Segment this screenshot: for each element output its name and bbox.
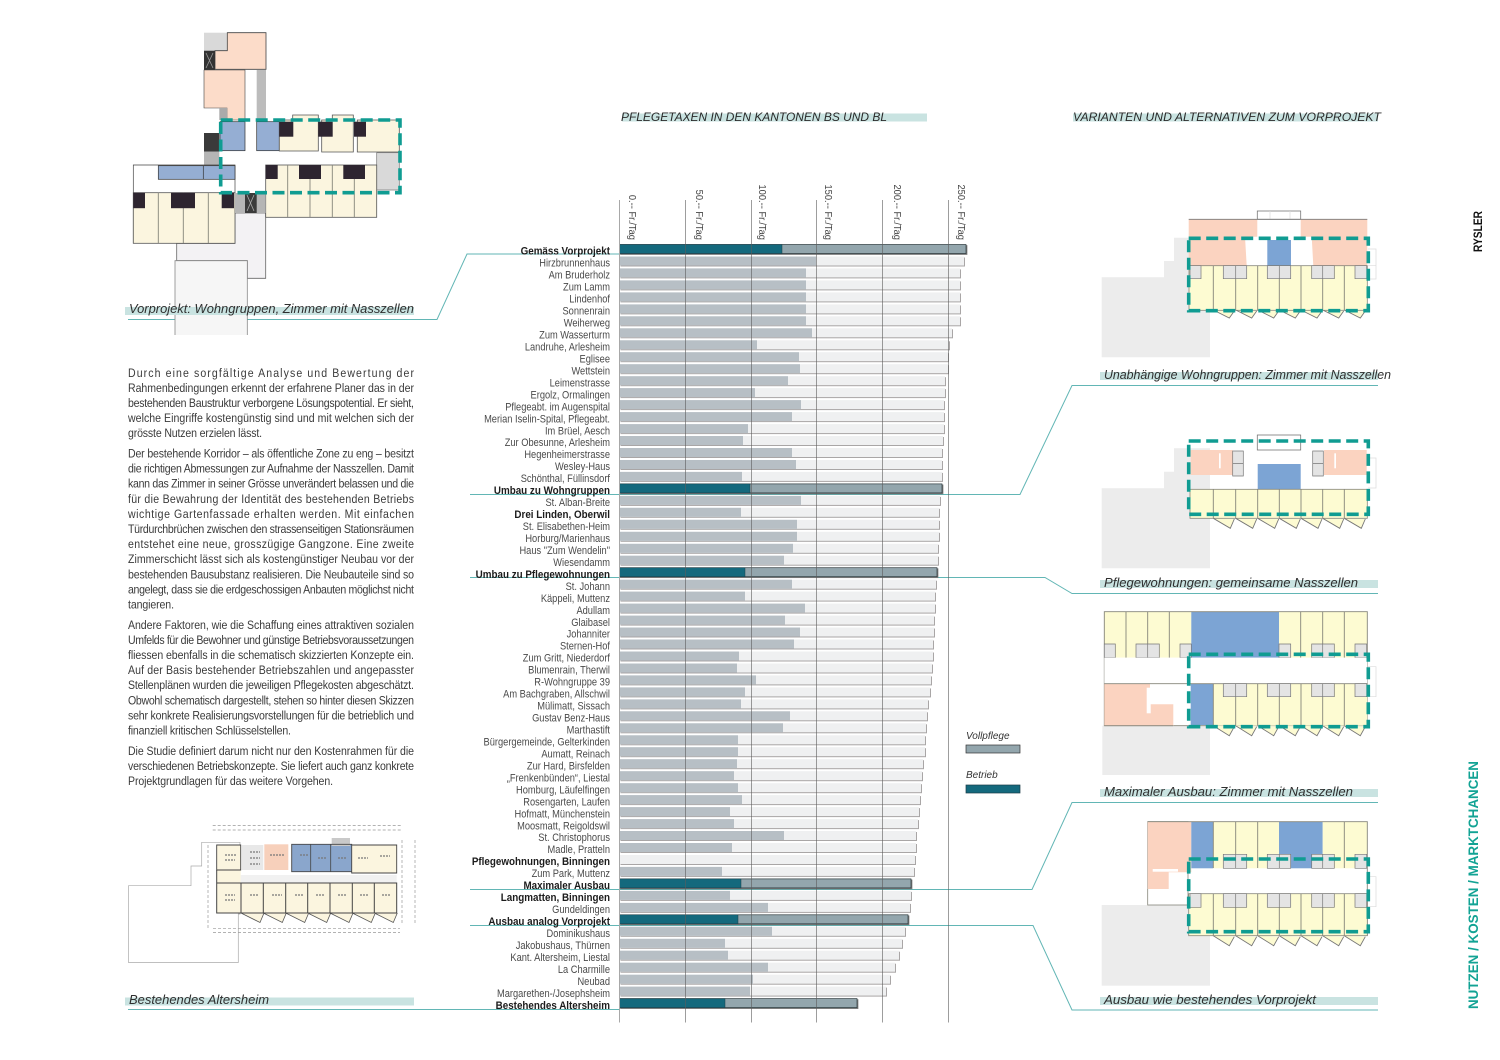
row: Hirzbrunnenhaus: Hirzbrunnenhaus xyxy=(539,258,610,270)
row: Sonnenrain xyxy=(562,304,960,318)
row: Frenkenbünden, Liestal xyxy=(507,771,922,785)
row: Zum Lamm xyxy=(563,280,960,294)
row: Bürgergemeinde, Gelterkinden xyxy=(484,735,925,749)
row: St. Elisabethen-Heim: St. Elisabethen-Heim xyxy=(523,521,610,533)
row: Eglisee xyxy=(580,352,948,366)
row: Wettstein: Wettstein xyxy=(571,366,610,378)
text block: body copy: Türdurchbrüchen zwischen den strassenseitigen Stationsräumen xyxy=(128,523,414,536)
row: Im Brüel, Aesch xyxy=(545,424,944,438)
row: St. Elisabethen-Heim xyxy=(523,520,939,533)
row: Homburg, Läufelfingen xyxy=(516,783,921,797)
row: Horburg/Marienhaus xyxy=(525,532,939,545)
row: St. Alban-Breite xyxy=(545,496,940,509)
row: Hofmatt, Münchenstein xyxy=(515,807,919,821)
row: Pflegeabt. im Augenspital: Pflegeabt. im Augenspital xyxy=(505,402,610,414)
row: Wesley-Haus: Wesley-Haus xyxy=(555,462,610,473)
caption: Bestehendes Altersheim xyxy=(125,992,414,1007)
row: St. Alban-Breite: St. Alban-Breite xyxy=(545,497,610,509)
row: Merian Iselin-Spital, Pflegeabt.: Merian Iselin-Spital, Pflegeabt. xyxy=(484,414,610,426)
row: Schönthal, Füllinsdorf: Schönthal, Füllinsdorf xyxy=(521,473,610,485)
row: Maximaler Ausbau xyxy=(523,879,911,892)
row: Hirzbrunnenhaus xyxy=(539,256,964,270)
row: Bestehendes Altersheim xyxy=(496,999,857,1012)
row: Neubad xyxy=(577,975,890,988)
row: Schönthal, Füllinsdorf xyxy=(521,472,942,485)
row: Gustav Benz-Haus xyxy=(532,711,927,725)
row: R-Wohngruppe 39: R-Wohngruppe 39 xyxy=(534,677,610,689)
floor plan: Ausbau wie Vorprojekt xyxy=(1102,822,1376,986)
legend: Vollpflege xyxy=(966,731,1010,742)
chart axis: grid lines and scale labels: 200.-- Fr./Tag xyxy=(891,184,902,240)
text block: body copy: Andere Faktoren, wie die Schaffung eines attraktiven sozialen xyxy=(128,619,414,632)
row: Frenkenbünden, Liestal: „Frenkenbünden“, Liestal xyxy=(507,773,610,785)
chart axis: grid lines and scale labels: 0.-- Fr./Tag xyxy=(626,195,637,240)
chart axis: grid lines and scale labels: 250.-- Fr./Tag xyxy=(955,184,966,240)
floor plan: Maximaler Ausbau xyxy=(1102,612,1376,775)
chart axis: grid lines and scale labels: 100.-- Fr./Tag xyxy=(756,184,767,240)
text block: body copy: tangieren. xyxy=(128,599,174,612)
row: La Charmille xyxy=(558,963,895,976)
text block: body copy: wichtige Gartenfassade erhalten werden. Mit einfachen xyxy=(127,508,414,521)
row: Gemäss Vorprojekt xyxy=(521,244,966,258)
row: Zum Gritt, Niederdorf xyxy=(523,652,933,665)
text block: body copy: bestehenden Bausubstanz realisieren. Die Neubauteile sind so xyxy=(128,569,414,581)
text block: body copy: finanziell kritischen Schlüsselstellen. xyxy=(128,725,291,738)
caption: Unabhängige Wohngruppen: Unabhängige Wohngruppen: Zimmer mit Nasszellen xyxy=(1104,367,1391,382)
row: Jakobushaus, Thürnen: Jakobushaus, Thürnen xyxy=(516,940,610,952)
row: Mülimatt, Sissach: Mülimatt, Sissach xyxy=(537,701,610,713)
row: Langmatten, Binningen: Langmatten, Binningen xyxy=(501,893,610,904)
row: Adullam: Adullam xyxy=(576,605,610,617)
row: Dominikushaus xyxy=(547,927,905,940)
row: Dominikushaus: Dominikushaus xyxy=(547,928,610,940)
text block: body copy: grösste Nutzen erzielen lässt. xyxy=(128,427,262,440)
row: Drei Linden, Oberwil xyxy=(514,508,939,521)
text block: body copy: bestehenden Baustruktur verborgene Lösungspotential. Er sieht, xyxy=(128,397,414,410)
row: Kant. Altersheim, Liestal xyxy=(510,951,899,964)
text block: body copy: Zimmerschicht lässt sich als kostengünstiger Neubau vor der xyxy=(128,554,414,566)
row: Blumenrain, Therwil: Blumenrain, Therwil xyxy=(528,665,610,677)
text block: body copy: Durch eine sorgfältige Analyse und Bewertung der xyxy=(128,367,414,380)
row: Am Bachgraben, Allschwil: Am Bachgraben, Allschwil xyxy=(503,689,610,701)
heading: Pflegetaxen: PFLEGETAXEN IN DEN KANTONEN BS UND BL xyxy=(621,110,887,124)
text block: body copy: verschiedenen Betriebskonzepte. Sie liefert auch ganz konkrete xyxy=(128,760,414,773)
row: Sonnenrain: Sonnenrain xyxy=(562,306,610,318)
bar chart: Pflegetaxen xyxy=(472,244,966,1012)
row: Margarethen-/Josephsheim: Margarethen-/Josephsheim xyxy=(497,988,610,1000)
row: Weiherweg xyxy=(564,316,960,330)
text block: body copy: Die Studie definiert darum nicht nur den Kostenrahmen für die xyxy=(128,745,414,758)
row: Landruhe, Arlesheim xyxy=(525,340,949,354)
floor plan: bestehendes Altersheim xyxy=(128,826,415,962)
row: Gemäss Vorprojekt: Gemäss Vorprojekt xyxy=(521,246,610,258)
text block: body copy: sehr konkrete Realisierungsvorstellungen für die betrieblich und xyxy=(128,710,414,722)
row: Ergolz, Ormalingen: Ergolz, Ormalingen xyxy=(531,390,610,402)
row: Umbau zu Pflegewohnungen: Umbau zu Pflegewohnungen xyxy=(476,569,610,581)
text block: body copy xyxy=(127,367,415,788)
row: Eglisee: Eglisee xyxy=(580,354,610,366)
row: Käppeli, Muttenz: Käppeli, Muttenz xyxy=(541,593,610,605)
row: Zur Obesunne, Arlesheim: Zur Obesunne, Arlesheim xyxy=(505,438,610,449)
row: Glaibasel xyxy=(571,616,934,629)
row: Kant. Altersheim, Liestal: Kant. Altersheim, Liestal xyxy=(510,952,610,964)
row: Adullam xyxy=(576,604,935,617)
row: Mülimatt, Sissach xyxy=(537,699,928,713)
row: Haus Zum Wendelin: Haus "Zum Wendelin" xyxy=(519,545,610,557)
text block: body copy: für die Bewahrung der Identität des bestehenden Betriebs xyxy=(128,493,414,506)
row: Hofmatt, Münchenstein: Hofmatt, Münchenstein xyxy=(515,809,610,821)
text block: body copy: angelegt, dass sie die erdgeschossigen Anbauten möglichst nicht xyxy=(128,584,415,597)
caption: Ausbau wie Vorprojekt: Ausbau wie bestehendes Vorprojekt xyxy=(1103,992,1317,1007)
row: Glaibasel: Glaibasel xyxy=(571,617,610,629)
row: Am Bruderholz: Am Bruderholz xyxy=(549,270,610,282)
row: Aumatt, Reinach xyxy=(541,747,925,761)
text block: body copy: kann das Zimmer in seiner Grösse unverändert belassen und die xyxy=(128,478,414,491)
row: Johanniter xyxy=(567,628,934,641)
row: Horburg/Marienhaus: Horburg/Marienhaus xyxy=(525,533,610,545)
caption: Pflegewohnungen: Pflegewohnungen: gemeinsame Nasszellen xyxy=(1104,575,1358,590)
row: Am Bachgraben, Allschwil xyxy=(503,687,930,701)
chart axis: grid lines and scale labels: 50.-- Fr./Tag xyxy=(693,190,704,240)
text block: body copy: Der bestehende Korridor – als öffentliche Zone zu eng – besitzt xyxy=(128,448,415,461)
row: St. Johann xyxy=(566,580,936,593)
row: Zur Hard, Birsfelden xyxy=(527,759,923,773)
row: Rosengarten, Laufen: Rosengarten, Laufen xyxy=(523,797,610,809)
row: Umbau zu Wohngruppen: Umbau zu Wohngruppen xyxy=(494,486,610,497)
row: Ausbau analog Vorprojekt xyxy=(488,915,908,928)
row: St. Christophorus: St. Christophorus xyxy=(538,833,610,844)
row: Wettstein xyxy=(571,364,948,378)
row: Blumenrain, Therwil xyxy=(528,664,932,677)
floor plan: Unabhängige Wohngruppen xyxy=(1102,211,1376,357)
row: Ergolz, Ormalingen xyxy=(531,388,945,402)
row: Jakobushaus, Thürnen xyxy=(516,939,902,952)
row: Wiesendamm xyxy=(553,556,938,569)
row: Johanniter: Johanniter xyxy=(567,629,611,641)
text block: body copy: Stellenplänen wurden die jeweiligen Pflegekosten abgeschätzt. xyxy=(128,680,414,692)
row: Wiesendamm: Wiesendamm xyxy=(553,557,610,569)
row: Lindenhof: Lindenhof xyxy=(569,294,610,306)
row: Gundeldingen xyxy=(552,903,910,916)
row: Pflegeabt. im Augenspital xyxy=(505,400,944,414)
row: Gustav Benz-Haus: Gustav Benz-Haus xyxy=(532,713,610,725)
legend xyxy=(966,731,1020,793)
row: Zur Obesunne, Arlesheim xyxy=(505,436,943,449)
row: Sternen-Hof: Sternen-Hof xyxy=(560,641,610,653)
text block: body copy: die richtigen Abmessungen zur Aufnahme der Nasszellen. Damit xyxy=(128,463,415,476)
row: Maximaler Ausbau: Maximaler Ausbau xyxy=(523,881,610,892)
caption: Vorprojekt: Vorprojekt: Wohngruppen, Zimmer mit Nasszellen xyxy=(129,301,414,316)
row: Am Bruderholz xyxy=(549,268,960,282)
row: Sternen-Hof xyxy=(560,640,933,653)
row: Käppeli, Muttenz xyxy=(541,592,935,605)
row: Wesley-Haus xyxy=(555,460,942,473)
row: Ausbau analog Vorprojekt: Ausbau analog Vorprojekt xyxy=(488,917,610,928)
row: Landruhe, Arlesheim: Landruhe, Arlesheim xyxy=(525,342,610,354)
row: Im Brüel, Aesch: Im Brüel, Aesch xyxy=(545,426,610,438)
floor plan: Vorprojekt xyxy=(133,33,400,335)
row: R-Wohngruppe 39 xyxy=(534,675,931,689)
chart axis: grid lines and scale labels xyxy=(620,184,966,1022)
row: Zum Wasserturm xyxy=(539,328,952,342)
row: Marthastift: Marthastift xyxy=(567,725,610,737)
caption: Bestehendes Altersheim: Bestehendes Altersheim xyxy=(129,992,269,1007)
text block: body copy: welche Eingriffe kostengünstig sind und mit welchen sich der xyxy=(127,412,414,425)
chart axis: grid lines and scale labels: 150.-- Fr./Tag xyxy=(822,184,833,240)
row: Moosmatt, Reigoldswil xyxy=(517,819,918,833)
text block: body copy: Obwohl schematisch dargestellt, stehen so hinter diesen Skizzen xyxy=(128,695,414,707)
caption: Maximaler Ausbau: Maximaler Ausbau: Zimmer mit Nasszellen xyxy=(1104,784,1353,799)
row: St. Johann: St. Johann xyxy=(566,581,610,593)
row: Madle, Pratteln: Madle, Pratteln xyxy=(548,845,610,856)
text block: body copy: entstehet eine neue, grosszügige Gangzone. Eine zweite xyxy=(128,539,414,551)
row: Margarethen-/Josephsheim xyxy=(497,987,886,1000)
text block: body copy: Umfelds für die Bewohner und günstige Betriebsvoraussetzungen xyxy=(128,634,414,647)
row: Drei Linden, Oberwil: Drei Linden, Oberwil xyxy=(514,510,610,521)
row: Moosmatt, Reigoldswil: Moosmatt, Reigoldswil xyxy=(517,821,610,833)
row: St. Christophorus xyxy=(538,831,916,844)
row: Gundeldingen: Gundeldingen xyxy=(552,904,610,916)
row: Zum Gritt, Niederdorf: Zum Gritt, Niederdorf xyxy=(523,653,610,665)
row: Madle, Pratteln xyxy=(548,843,916,856)
row: Weiherweg: Weiherweg xyxy=(564,318,610,330)
row: Umbau zu Wohngruppen xyxy=(494,484,942,497)
row: Umbau zu Pflegewohnungen xyxy=(476,568,937,581)
row: La Charmille: La Charmille xyxy=(558,964,610,976)
side label: Nutzen / Kosten / Marktchancen: NUTZEN / KOSTEN / MARKTCHANCEN xyxy=(1465,761,1481,1009)
row: Zum Wasserturm: Zum Wasserturm xyxy=(539,330,610,342)
text block: body copy: Rahmenbedingungen erkennt der erfahrene Planer das in der xyxy=(128,382,414,395)
row: Neubad: Neubad xyxy=(577,976,610,988)
row: Leimenstrasse: Leimenstrasse xyxy=(550,378,610,390)
row: Hegenheimerstrasse: Hegenheimerstrasse xyxy=(524,450,610,461)
row: Zum Lamm: Zum Lamm xyxy=(563,282,610,294)
text block: body copy: Auf der Basis bestehender Betriebszahlen und angepasster xyxy=(128,665,414,677)
row: Pflegewohnungen, Binningen: Pflegewohnungen, Binningen xyxy=(472,857,610,868)
row: Marthastift xyxy=(567,723,926,737)
row: Lindenhof xyxy=(569,292,960,306)
row: Zur Hard, Birsfelden: Zur Hard, Birsfelden xyxy=(527,761,610,773)
row: Haus Zum Wendelin xyxy=(519,544,938,557)
legend: Betrieb xyxy=(966,770,998,781)
connector lines xyxy=(128,254,1378,1010)
text block: body copy: Projektgrundlagen für das weitere Vorgehen. xyxy=(128,775,333,788)
row: Leimenstrasse xyxy=(550,376,945,390)
row: Aumatt, Reinach: Aumatt, Reinach xyxy=(541,749,610,761)
row: Zum Park, Muttenz: Zum Park, Muttenz xyxy=(532,868,610,880)
row: Rosengarten, Laufen xyxy=(523,795,920,809)
row: Hegenheimerstrasse xyxy=(524,448,942,461)
row: Merian Iselin-Spital, Pflegeabt. xyxy=(484,412,944,426)
side label: Rysler: RYSLER xyxy=(1471,211,1485,252)
floor plan: Pflegewohnungen xyxy=(1102,435,1376,568)
row: Bürgergemeinde, Gelterkinden: Bürgergemeinde, Gelterkinden xyxy=(484,737,610,749)
row: Bestehendes Altersheim: Bestehendes Altersheim xyxy=(496,1000,610,1012)
row: Langmatten, Binningen xyxy=(501,891,911,904)
row: Pflegewohnungen, Binningen xyxy=(472,855,915,868)
heading: Varianten: VARIANTEN UND ALTERNATIVEN ZUM VORPROJEKT xyxy=(1073,110,1383,124)
row: Homburg, Läufelfingen: Homburg, Läufelfingen xyxy=(516,785,610,797)
text block: body copy: fliessen ebenfalls in die schematisch skizzierten Konzepte ein. xyxy=(128,650,414,662)
row: Zum Park, Muttenz xyxy=(532,867,914,880)
